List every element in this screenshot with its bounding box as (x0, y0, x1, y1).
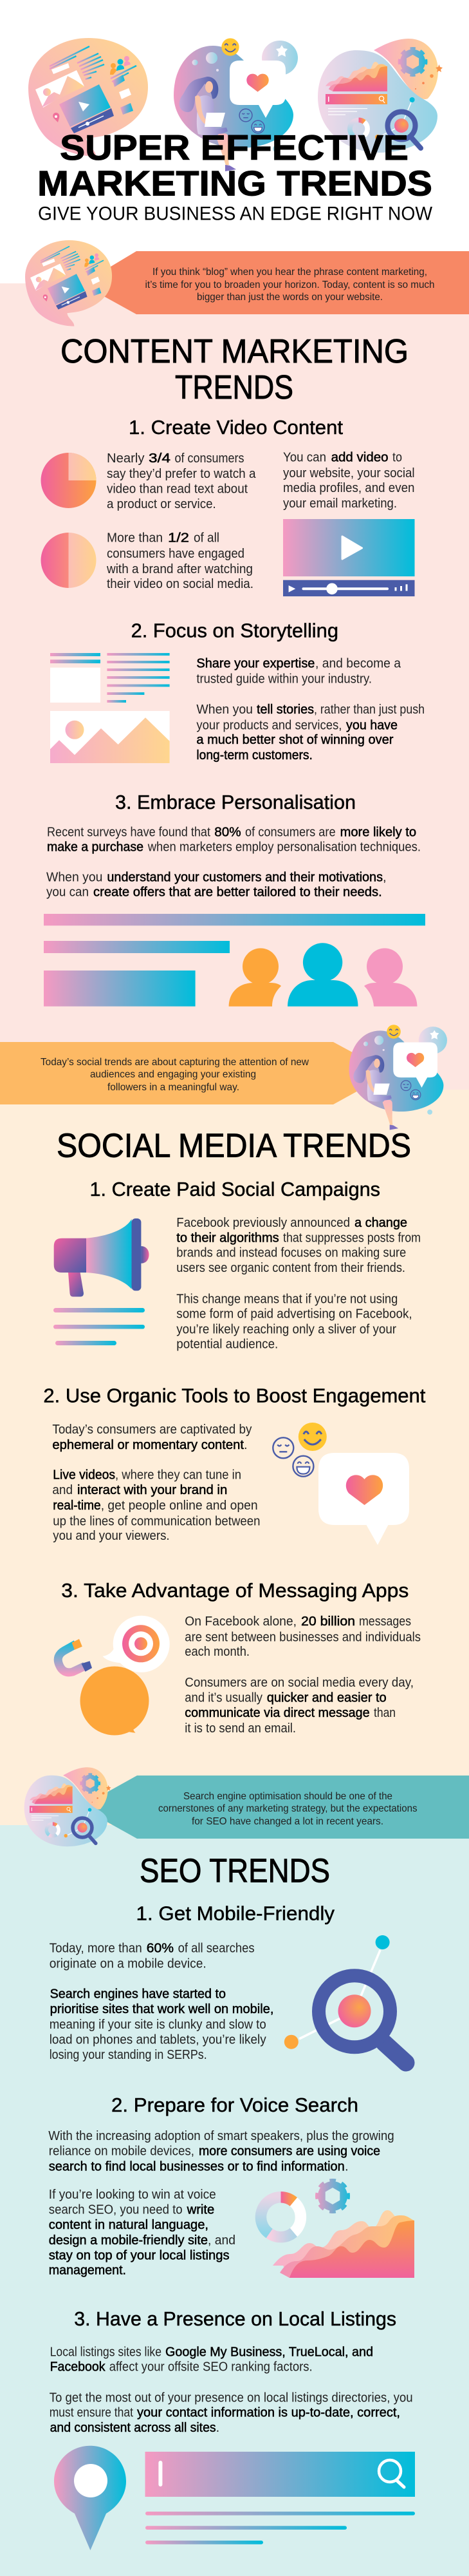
text: personalisation stats: you can (46, 886, 89, 900)
banner text: for SEO have changed a lot in recent years. (192, 1816, 383, 1827)
title: SUPER EFFECTIVE (60, 128, 409, 167)
text: share your expertise (196, 657, 425, 762)
text: facebook algorithm: a change (354, 1216, 407, 1230)
banner text: If you think “blog” when you hear the phrase content marketing, (152, 267, 427, 278)
panel: seo intro banner (24, 1767, 469, 1846)
decorative bars: megaphone lines (53, 1308, 145, 1345)
text: one half stat: of all (194, 531, 219, 545)
icon: content blob small (25, 240, 112, 327)
decorative bars: search results (145, 2512, 415, 2544)
panel: content marketing trends (41, 333, 425, 1007)
text: share your expertise: you have (346, 718, 398, 732)
text: mobile friendly: Today, more than (50, 1942, 142, 1956)
text: messaging apps: each month. (185, 1645, 250, 1659)
chart: donut (261, 2197, 300, 2237)
text: facebook algorithm: Facebook previously announced (176, 1216, 350, 1230)
background: intro white (0, 0, 469, 283)
icon: orange speech bubble (80, 1667, 149, 1735)
text: three quarters stat: a product or service. (107, 497, 216, 511)
text: personalisation stats: Recent surveys have found that (47, 825, 210, 839)
text: messaging apps: than (374, 1706, 396, 1720)
text: add video: your email marketing. (283, 497, 397, 511)
text: local listings: To get the most out of your presence on local listings directories, you (50, 2391, 413, 2405)
text: messaging apps: On Facebook alone, (185, 1615, 297, 1629)
text: three quarters stat: Nearly (107, 451, 144, 466)
text: share your expertise: , and become a (315, 657, 401, 671)
text: personalisation stats (46, 825, 421, 900)
text: share your expertise: tell stories (257, 703, 314, 717)
panel: social media trends (43, 1128, 426, 1736)
text: facebook algorithm: users see organic content from their friends. (176, 1261, 405, 1275)
illustration: social blob (174, 38, 298, 171)
text: mobile friendly: losing your standing in SERPs. (50, 2048, 207, 2062)
text: personalisation stats: understand your customers and their motivations (107, 870, 383, 884)
text: mobile friendly: prioritise sites that work well on mobile, (50, 2002, 273, 2016)
text: three quarters stat: of consumers (175, 451, 244, 466)
text: mobile friendly: 60% (147, 1942, 174, 1956)
text: voice search advice: write (187, 2202, 214, 2217)
banner text: Search engine optimisation should be one of the (183, 1791, 392, 1802)
text: local listings: affect your offsite SEO ranking factors. (109, 2360, 313, 2374)
text: local listings: must ensure that (50, 2405, 133, 2420)
text: voice search advice (49, 2188, 235, 2278)
text: three quarters stat: 3/4 (149, 451, 170, 466)
banner text (41, 1057, 309, 1093)
text: mobile friendly: originate on a mobile device. (50, 1957, 207, 1971)
text: personalisation stats: more likely to (340, 825, 416, 839)
heading: content marketing trends: TRENDS (175, 369, 293, 406)
text: three quarters stat: video than read text about (107, 482, 248, 496)
text: mobile friendly: Search engines have started to (50, 1987, 226, 2002)
text: ephemeral content: , get people online and open (101, 1499, 258, 1513)
text: messaging apps: and it’s usually (185, 1690, 262, 1705)
text: facebook algorithm (176, 1216, 421, 1351)
icon: video player (283, 519, 414, 596)
banner text (158, 1791, 417, 1827)
banner shape (0, 1042, 391, 1104)
text: ephemeral content: Live videos (53, 1468, 115, 1482)
text: personalisation stats: When you (46, 870, 103, 884)
text: mobile friendly: meaning if your site is clunky and slow to (50, 2018, 266, 2032)
text: add video: add video (331, 451, 389, 465)
text: one half stat: consumers have engaged (107, 547, 244, 561)
text: personalisation stats: when marketers employ personalisation techniques. (147, 840, 421, 855)
text: share your expertise: your products and services, (196, 718, 342, 732)
text: facebook algorithm: to their algorithms (176, 1231, 279, 1245)
text: messaging apps: quicker and easier to (267, 1690, 387, 1705)
text: ephemeral content: real-time (53, 1499, 101, 1513)
icon: heart speech bubble (318, 1453, 409, 1545)
icon: social blob small (349, 1025, 447, 1130)
icon: magnifier (284, 1935, 406, 2063)
pie chart: three quarters (41, 453, 97, 508)
text: facebook algorithm: some form of paid advertising on Facebook, (176, 1307, 412, 1321)
text: voice search intro: . (345, 2160, 349, 2174)
text: facebook algorithm: that suppresses posts from (283, 1231, 421, 1245)
panel: header (28, 38, 443, 224)
illustration: content blob (28, 38, 148, 156)
text: local listings: Google My Business, TrueLocal, and (165, 2345, 373, 2359)
text: share your expertise: a much better shot of winning over (196, 733, 394, 747)
text: one half stat: More than (107, 531, 163, 545)
text: mobile friendly (50, 1942, 273, 2062)
text: add video: You can (283, 451, 326, 465)
icon: target speech bubble (103, 1616, 170, 1672)
subtitle: GIVE YOUR BUSINESS AN EDGE RIGHT NOW (38, 204, 432, 224)
text: facebook algorithm: you’re likely reaching only a sliver of your (176, 1323, 396, 1337)
subheading: messaging apps: 3. Take Advantage of Messaging Apps (61, 1579, 409, 1602)
text: facebook algorithm: potential audience. (176, 1337, 278, 1351)
text: add video: media profiles, and even (283, 481, 414, 495)
text: mobile friendly: load on phones and tablets, you’re likely (50, 2033, 266, 2047)
text: share your expertise: Share your expertise (196, 657, 315, 671)
text: voice search intro: search to find local businesses or to find information (49, 2160, 345, 2174)
text: voice search intro (48, 2129, 394, 2174)
text: local listings: . (216, 2421, 219, 2435)
illustration: seo blob (318, 39, 443, 153)
text: add video: to (392, 451, 402, 465)
text: voice search intro: more consumers are using voice (199, 2145, 380, 2159)
text: ephemeral content: . (244, 1438, 248, 1452)
background: social media (0, 1090, 469, 1825)
text: messaging apps (185, 1615, 421, 1736)
text: three quarters stat: say they’d prefer to watch a (107, 467, 256, 481)
text: personalisation stats: , (383, 870, 387, 884)
banner text: followers in a meaningful way. (107, 1082, 239, 1093)
text: voice search advice: design a mobile-friendly site (49, 2233, 208, 2248)
text: ephemeral content: Today’s consumers are captivated by (52, 1423, 252, 1437)
text: facebook algorithm: brands and instead focuses on making sure (176, 1246, 406, 1260)
banner shape (80, 1776, 469, 1839)
text: local listings: and consistent across all sites (50, 2421, 216, 2435)
banner text: Today’s social trends are about capturing the attention of new (41, 1057, 309, 1068)
text: one half stat (106, 531, 253, 591)
text: share your expertise: trusted guide within your industry. (196, 672, 372, 687)
chart: rising area chart (273, 2210, 414, 2278)
text: voice search advice: stay on top of your local listings (49, 2248, 230, 2262)
text: local listings: Local listings sites like (50, 2345, 161, 2359)
text: voice search advice: If you’re looking to win at voice (49, 2188, 216, 2202)
icon: search bar (145, 2452, 415, 2497)
banner text: bigger than just the words on your website. (197, 292, 383, 303)
text: personalisation stats: make a purchase (47, 840, 143, 855)
text: ephemeral content (52, 1423, 261, 1543)
heading: seo trends: SEO TRENDS (140, 1852, 330, 1889)
icon: magnet (58, 1639, 92, 1672)
text: ephemeral content: you and your viewers. (53, 1529, 170, 1543)
text: ephemeral content: ephemeral or momentary content (52, 1438, 244, 1452)
panel: social media intro banner (0, 1025, 447, 1130)
icon: audience people (229, 943, 417, 1007)
text: ephemeral content: interact with your brand in (77, 1483, 227, 1497)
text: share your expertise: , rather than just push (314, 703, 425, 717)
text: voice search intro: reliance on mobile devices, (49, 2145, 194, 2159)
text: personalisation stats: create offers that are better tailored to their needs. (93, 886, 382, 900)
text: three quarters stat (107, 451, 256, 511)
heading: content marketing trends (60, 333, 409, 406)
heading: social media trends: SOCIAL MEDIA TRENDS (57, 1128, 411, 1165)
text: one half stat: with a brand after watching (106, 562, 253, 576)
icon: location pin (54, 2446, 126, 2550)
text: voice search intro: With the increasing adoption of smart speakers, plus the growing (48, 2129, 394, 2143)
text: messaging apps: 20 billion (301, 1615, 355, 1629)
heading: content marketing trends: CONTENT MARKETING (60, 333, 409, 370)
text: mobile friendly: of all searches (178, 1942, 255, 1956)
subheading: embrace personalisation: 3. Embrace Personalisation (115, 791, 356, 813)
text: voice search advice: search SEO, you need to (49, 2202, 183, 2217)
text: share your expertise: When you (196, 703, 253, 717)
banner text: it’s time for you to broaden your horizon. Today, content is so much (145, 279, 435, 290)
text: facebook algorithm: This change means that if you’re not using (176, 1292, 398, 1306)
banner text: audiences and engaging your existing (90, 1069, 256, 1080)
subheading: create video content: 1. Create Video Content (129, 416, 343, 439)
illustration: article layout (50, 653, 170, 763)
text: messaging apps: it is to send an email. (185, 1721, 296, 1736)
text: voice search advice: management. (49, 2264, 126, 2278)
panel: content marketing intro banner (25, 240, 469, 327)
icon: seo blob small (24, 1767, 111, 1846)
pie chart: one half (41, 533, 97, 588)
icon: emoji reactions (273, 1423, 327, 1477)
text: ephemeral content: and (52, 1483, 73, 1497)
text: one half stat: their video on social media. (107, 577, 253, 591)
text: local listings (50, 2345, 413, 2435)
text: messaging apps: communicate via direct message (185, 1706, 370, 1720)
subheading: organic tools: 2. Use Organic Tools to Boost Engagement (43, 1384, 426, 1406)
background: seo (0, 1825, 469, 2576)
subheading: voice search: 2. Prepare for Voice Search (111, 2094, 358, 2116)
subheading: focus on storytelling: 2. Focus on Storytelling (131, 619, 338, 641)
text: personalisation stats: 80% (214, 825, 241, 839)
text: ephemeral content: , where they can tune in (115, 1468, 241, 1482)
panel: seo trends (48, 1852, 415, 2550)
title (37, 128, 432, 204)
text: messaging apps: messages (359, 1615, 411, 1629)
text: one half stat: 1/2 (168, 531, 189, 545)
text: personalisation stats: of consumers are (245, 825, 336, 839)
icon: megaphone (54, 1218, 149, 1297)
chart: audience bars (44, 914, 425, 1007)
title: MARKETING TRENDS (37, 164, 432, 204)
subheading: local listings: 3. Have a Presence on Local Listings (74, 2307, 396, 2330)
banner shape (82, 251, 469, 314)
banner text (145, 267, 435, 303)
text: messaging apps: Consumers are on social media every day, (185, 1676, 414, 1690)
subheading: paid social campaigns: 1. Create Paid Social Campaigns (90, 1178, 380, 1200)
text: local listings: your contact information is up-to-date, correct, (137, 2405, 400, 2420)
banner text: cornerstones of any marketing strategy, but the expectations (158, 1803, 417, 1814)
text: add video (283, 451, 414, 511)
text: messaging apps: are sent between businesses and individuals (185, 1630, 421, 1644)
subheading: mobile friendly: 1. Get Mobile-Friendly (136, 1902, 335, 1925)
background: content marketing (0, 283, 469, 1090)
text: voice search advice: content in natural language, (49, 2218, 208, 2232)
text: share your expertise: long-term customers. (196, 748, 313, 762)
text: voice search advice: , and (208, 2233, 235, 2248)
text: ephemeral content: up the lines of communication between (53, 1514, 261, 1528)
icon: gear (317, 2181, 349, 2211)
text: local listings: Facebook (50, 2360, 106, 2374)
text: add video: your website, your social (283, 466, 414, 480)
